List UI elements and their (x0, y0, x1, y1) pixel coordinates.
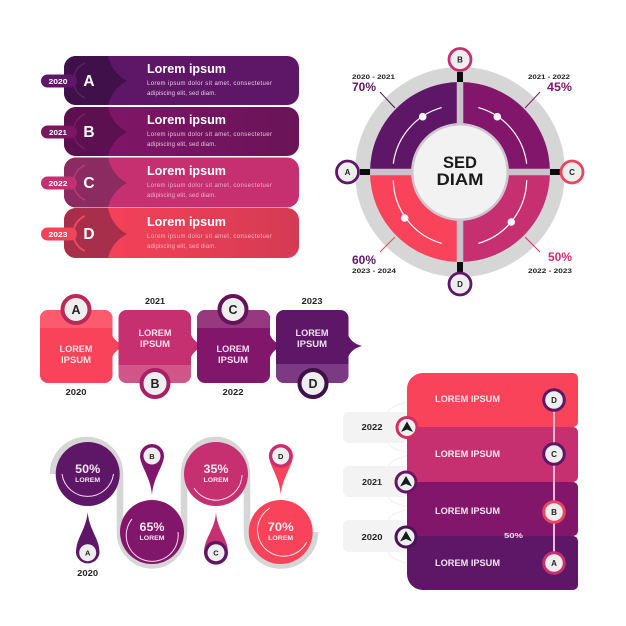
row C (41, 158, 299, 208)
label 2021-2022 (528, 74, 572, 94)
label 2023-2024: 2023 - 2024 (352, 268, 396, 275)
box 2023: IPSUM (297, 339, 327, 349)
circle 35% (184, 442, 248, 506)
row B: 2021 (49, 128, 67, 137)
row A: 2020 (48, 77, 68, 86)
circle 70%: 70% (268, 520, 294, 534)
badge A (544, 553, 564, 573)
row C: Lorem ipsum dolor sit amet, consectetuer (147, 183, 272, 189)
badge D (449, 273, 471, 295)
box 2022: LOREM (216, 344, 250, 354)
label 2020: 2020 (77, 569, 99, 578)
badge C (220, 296, 246, 323)
row D: adipiscing elit, sed diam. (147, 244, 216, 250)
label 2021-2022: 45% (547, 82, 572, 94)
label 2020-2021 (352, 74, 395, 94)
panel: stacked rows (343, 373, 578, 590)
leader lines (380, 92, 540, 252)
row B (41, 107, 299, 156)
label 2022-2023 (528, 252, 572, 275)
badge B (544, 502, 564, 522)
icon: arrow 2022 (397, 418, 417, 438)
box 2022: 2022 (222, 388, 244, 397)
outer ring (355, 67, 565, 277)
row C: adipiscing elit, sed diam. (147, 193, 216, 199)
panel: timeline boxes (40, 296, 362, 397)
year tab 2020 (343, 520, 409, 552)
pin C: C (213, 549, 219, 558)
row B: Lorem ipsum dolor sit amet, consectetuer (147, 132, 272, 138)
box 2021: 2021 (145, 297, 166, 306)
row D: Lorem ipsum (147, 215, 226, 229)
row 4 (407, 536, 578, 590)
icon: arrow 2020 (396, 527, 416, 547)
row D (41, 208, 299, 258)
badge D (300, 370, 326, 397)
box 2021: LOREM (138, 328, 172, 338)
badge B (449, 48, 471, 70)
label 2023-2024: 60% (352, 255, 376, 267)
box 2020: 2020 (66, 388, 87, 397)
row A (41, 56, 299, 105)
row D: 2023 (48, 230, 68, 239)
box 2023: 2023 (302, 297, 323, 306)
box 2023: LOREM (296, 328, 328, 338)
row A: adipiscing elit, sed diam. (147, 91, 216, 97)
badge A: A (71, 303, 81, 317)
center circle: DIAM (436, 170, 484, 189)
label 2022-2023: 50% (548, 252, 572, 264)
badge B (142, 370, 168, 397)
box 2023 (276, 297, 362, 383)
pin B: B (149, 452, 155, 461)
pin A (76, 512, 100, 563)
row 4: LOREM IPSUM (435, 558, 500, 568)
box 2020 (40, 310, 127, 397)
snake track (53, 440, 315, 566)
badge A: A (345, 168, 351, 177)
badge D: D (457, 280, 463, 289)
row 1 (407, 373, 578, 427)
label 2020-2021: 70% (352, 82, 376, 94)
panel: donut chart (336, 48, 583, 295)
row B: adipiscing elit, sed diam. (147, 142, 216, 148)
badge D: D (308, 377, 318, 391)
circle 65%: 65% (140, 520, 165, 534)
box 2022 (197, 310, 284, 397)
badge A: A (551, 559, 557, 568)
circle 35%: 35% (204, 462, 229, 476)
badge A (336, 161, 358, 183)
row C: 2022 (48, 179, 68, 188)
circle 50% (56, 442, 120, 506)
vertical connector (553, 400, 555, 563)
badge B: B (551, 508, 557, 517)
row 2: LOREM IPSUM (435, 449, 500, 459)
year tab 2022: 2022 (362, 423, 383, 432)
segment: 50% (460, 172, 550, 262)
row C: Lorem ipsum (147, 164, 226, 178)
label 50%: 50% (504, 531, 523, 540)
row D: Lorem ipsum dolor sit amet, consectetuer (147, 234, 272, 240)
badge D (544, 390, 564, 410)
row 3 (407, 482, 578, 536)
badge C: C (569, 168, 575, 177)
row A: A (83, 73, 95, 90)
box 2021: IPSUM (140, 339, 170, 349)
center circle: SED (443, 153, 477, 172)
segment: 60% (370, 172, 460, 262)
pin D (269, 444, 293, 495)
badge C: C (551, 450, 557, 459)
panel: lorem ipsum rows (41, 56, 299, 258)
label 2020-2021: 2020 - 2021 (352, 74, 395, 81)
panel: snake circles (53, 440, 315, 578)
arc markers (393, 108, 527, 243)
row B: Lorem ipsum (147, 113, 226, 127)
year tab 2021: 2021 (362, 478, 383, 487)
center circle (411, 123, 509, 221)
badge B: B (150, 377, 160, 391)
year tab 2022 (343, 412, 409, 443)
badge B: B (457, 56, 463, 64)
row B: B (83, 124, 95, 141)
label 2023-2024 (352, 255, 396, 275)
badge C (561, 161, 583, 183)
row A: Lorem ipsum (147, 62, 226, 76)
circle 35%: LOREM (204, 478, 228, 484)
connector ticks (360, 72, 560, 272)
row D: D (83, 226, 95, 243)
circle 50%: LOREM (75, 478, 100, 484)
circle 70% (249, 500, 313, 564)
row 3: LOREM IPSUM (435, 506, 500, 516)
badge C: C (228, 303, 238, 317)
pin C (204, 512, 228, 565)
row C: C (83, 175, 95, 192)
icon: arrow 2021 (396, 472, 416, 492)
segment: 70% (370, 82, 460, 172)
label 2021-2022: 2021 - 2022 (528, 74, 570, 81)
circle 65%: LOREM (140, 536, 164, 542)
badge D: D (551, 396, 557, 405)
year tab 2020: 2020 (362, 533, 383, 542)
row A: Lorem ipsum dolor sit amet, consectetuer (147, 81, 272, 87)
pin A: A (85, 549, 91, 558)
box 2020: IPSUM (61, 355, 91, 365)
pin B (140, 444, 164, 495)
year tab 2021 (343, 466, 409, 497)
label 2022-2023: 2022 - 2023 (528, 268, 572, 275)
pin D: D (278, 452, 284, 461)
circle 65% (120, 500, 184, 564)
badge C (544, 444, 564, 464)
segment: 45% (460, 82, 550, 172)
box 2021 (118, 297, 206, 383)
circle 50%: 50% (75, 462, 101, 476)
row 1: LOREM IPSUM (435, 394, 500, 404)
badge A (62, 296, 90, 323)
box 2022: IPSUM (218, 355, 248, 365)
circle 70%: LOREM (268, 536, 293, 542)
row 2 (407, 427, 578, 482)
box 2020: LOREM (60, 344, 92, 354)
